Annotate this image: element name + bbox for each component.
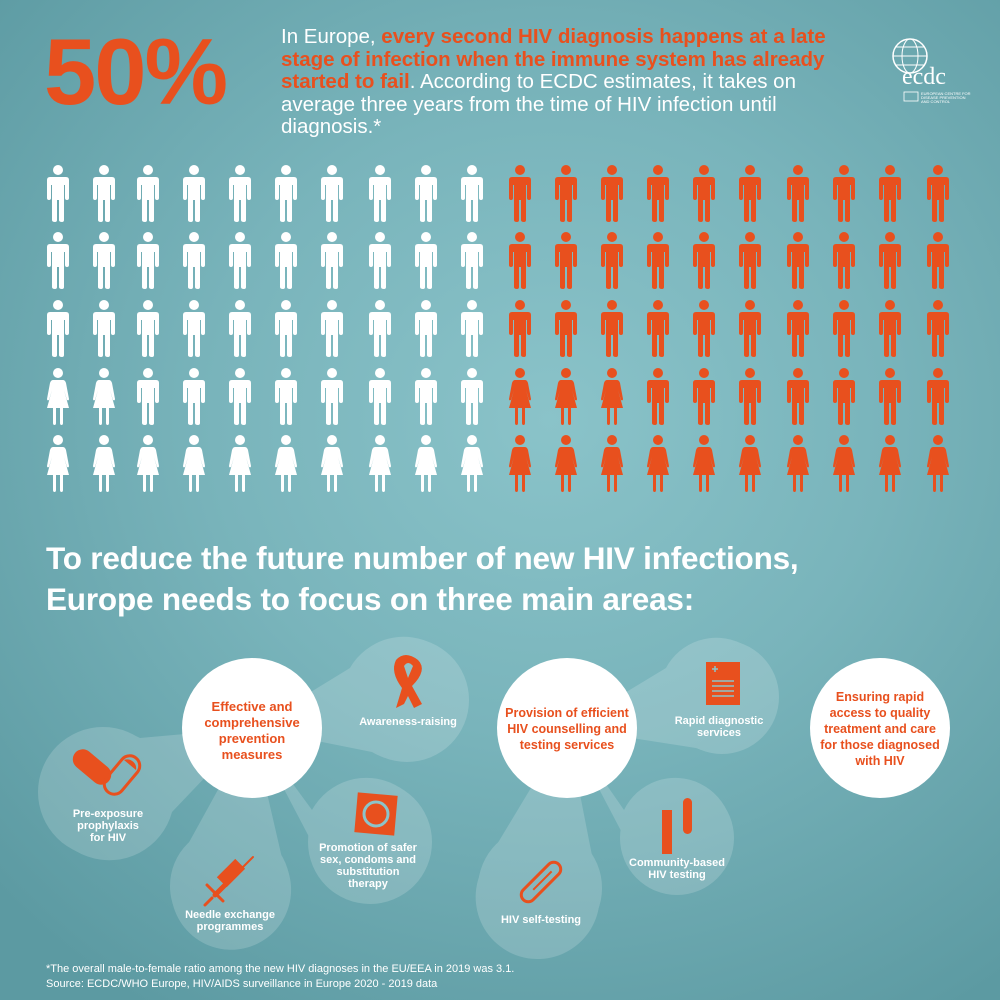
- footnote and source: Source: ECDC/WHO Europe, HIV/AIDS surveillance in Europe 2020 - 2019 data: [46, 978, 437, 990]
- petal: PrEP with pill icons: for HIV: [90, 832, 127, 844]
- petal: self-testing with test stick: [501, 859, 581, 926]
- petal: needle exchange with syringe icon: Needle exchange: [185, 909, 275, 921]
- circle: prevention measures: measures: [222, 747, 282, 762]
- petal: awareness-raising with ribbon icon: Awareness-raising: [359, 716, 457, 728]
- circle: treatment and care: treatment and care: [824, 722, 936, 736]
- intro paragraph: stage of infection when the immune system has already: [281, 48, 824, 70]
- intro paragraph: diagnosis.*: [281, 115, 381, 138]
- circle: prevention measures: comprehensive: [204, 715, 300, 730]
- circle: counselling and testing: HIV counselling and: [507, 722, 627, 736]
- petal: rapid diagnostic with document icon: Rapid diagnostic: [675, 715, 763, 727]
- headline percentage: 50%: [44, 19, 226, 124]
- logo: ecdc: [892, 38, 971, 104]
- footnote and source: [46, 963, 514, 990]
- circle: prevention measures: [182, 658, 322, 798]
- circle: treatment and care: [810, 658, 950, 798]
- circle: prevention measures: prevention: [219, 731, 285, 746]
- petal: condom promotion with package icon: therapy: [348, 878, 389, 890]
- petal: needle exchange with syringe icon: [185, 857, 275, 933]
- footnote and source: *The overall male-to-female ratio among the new HIV diagnoses in the EU/EEA in 2019 was 3.1.: [46, 963, 514, 975]
- intro paragraph: [281, 25, 826, 138]
- petal: PrEP with pill icons: [69, 745, 144, 844]
- intro paragraph: In Europe, every second HIV diagnosis happens at a late: [281, 25, 826, 48]
- circle: treatment and care: Ensuring rapid: [836, 690, 924, 704]
- intro paragraph: average three years from the time of HIV infection until: [281, 92, 777, 116]
- logo: ecdc: DISEASE PREVENTION: [921, 95, 966, 100]
- petal: condom promotion with package icon: substitution: [337, 866, 400, 878]
- circle: counselling and testing: testing services: [520, 738, 614, 752]
- petal: community-based testing with test tubes: HIV testing: [648, 869, 706, 881]
- petal: condom promotion with package icon: [319, 792, 418, 890]
- petal: awareness-raising with ribbon icon: [359, 655, 457, 728]
- section heading: Europe needs to focus on three main areas:: [46, 581, 694, 617]
- petal: self-testing with test stick: HIV self-testing: [501, 914, 581, 926]
- petal: condom promotion with package icon: Promotion of safer: [319, 842, 418, 854]
- diagram: three main areas with petals: [38, 636, 950, 959]
- logo: ecdc: AND CONTROL: [921, 99, 951, 104]
- petal: needle exchange with syringe icon: programmes: [197, 921, 263, 933]
- section heading: [46, 540, 798, 617]
- circle: treatment and care: access to quality: [830, 706, 930, 720]
- petal: rapid diagnostic with document icon: services: [697, 727, 741, 739]
- intro paragraph: started to fail. According to ECDC estimates, it takes on: [281, 70, 796, 93]
- petal: rapid diagnostic with document icon: [675, 662, 763, 739]
- circle: treatment and care: for those diagnosed: [820, 738, 940, 752]
- petal: community-based testing with test tubes: Community-based: [629, 857, 725, 869]
- circle: prevention measures: Effective and: [212, 699, 293, 714]
- petal: condom promotion with package icon: sex, condoms and: [320, 854, 416, 866]
- circle: treatment and care: with HIV: [854, 754, 905, 768]
- logo: ecdc: ecdc: [902, 64, 946, 90]
- pictogram grid: 100 people, 50 orange: [47, 165, 949, 492]
- circle: counselling and testing: Provision of efficient: [505, 706, 630, 720]
- petal: PrEP with pill icons: Pre-exposure: [73, 808, 143, 820]
- circle: counselling and testing: [497, 658, 637, 798]
- petal: community-based testing with test tubes: [629, 798, 725, 881]
- logo: ecdc: EUROPEAN CENTRE FOR: [921, 91, 971, 96]
- section heading: To reduce the future number of new HIV infections,: [46, 540, 798, 576]
- petal: PrEP with pill icons: prophylaxis: [77, 820, 139, 832]
